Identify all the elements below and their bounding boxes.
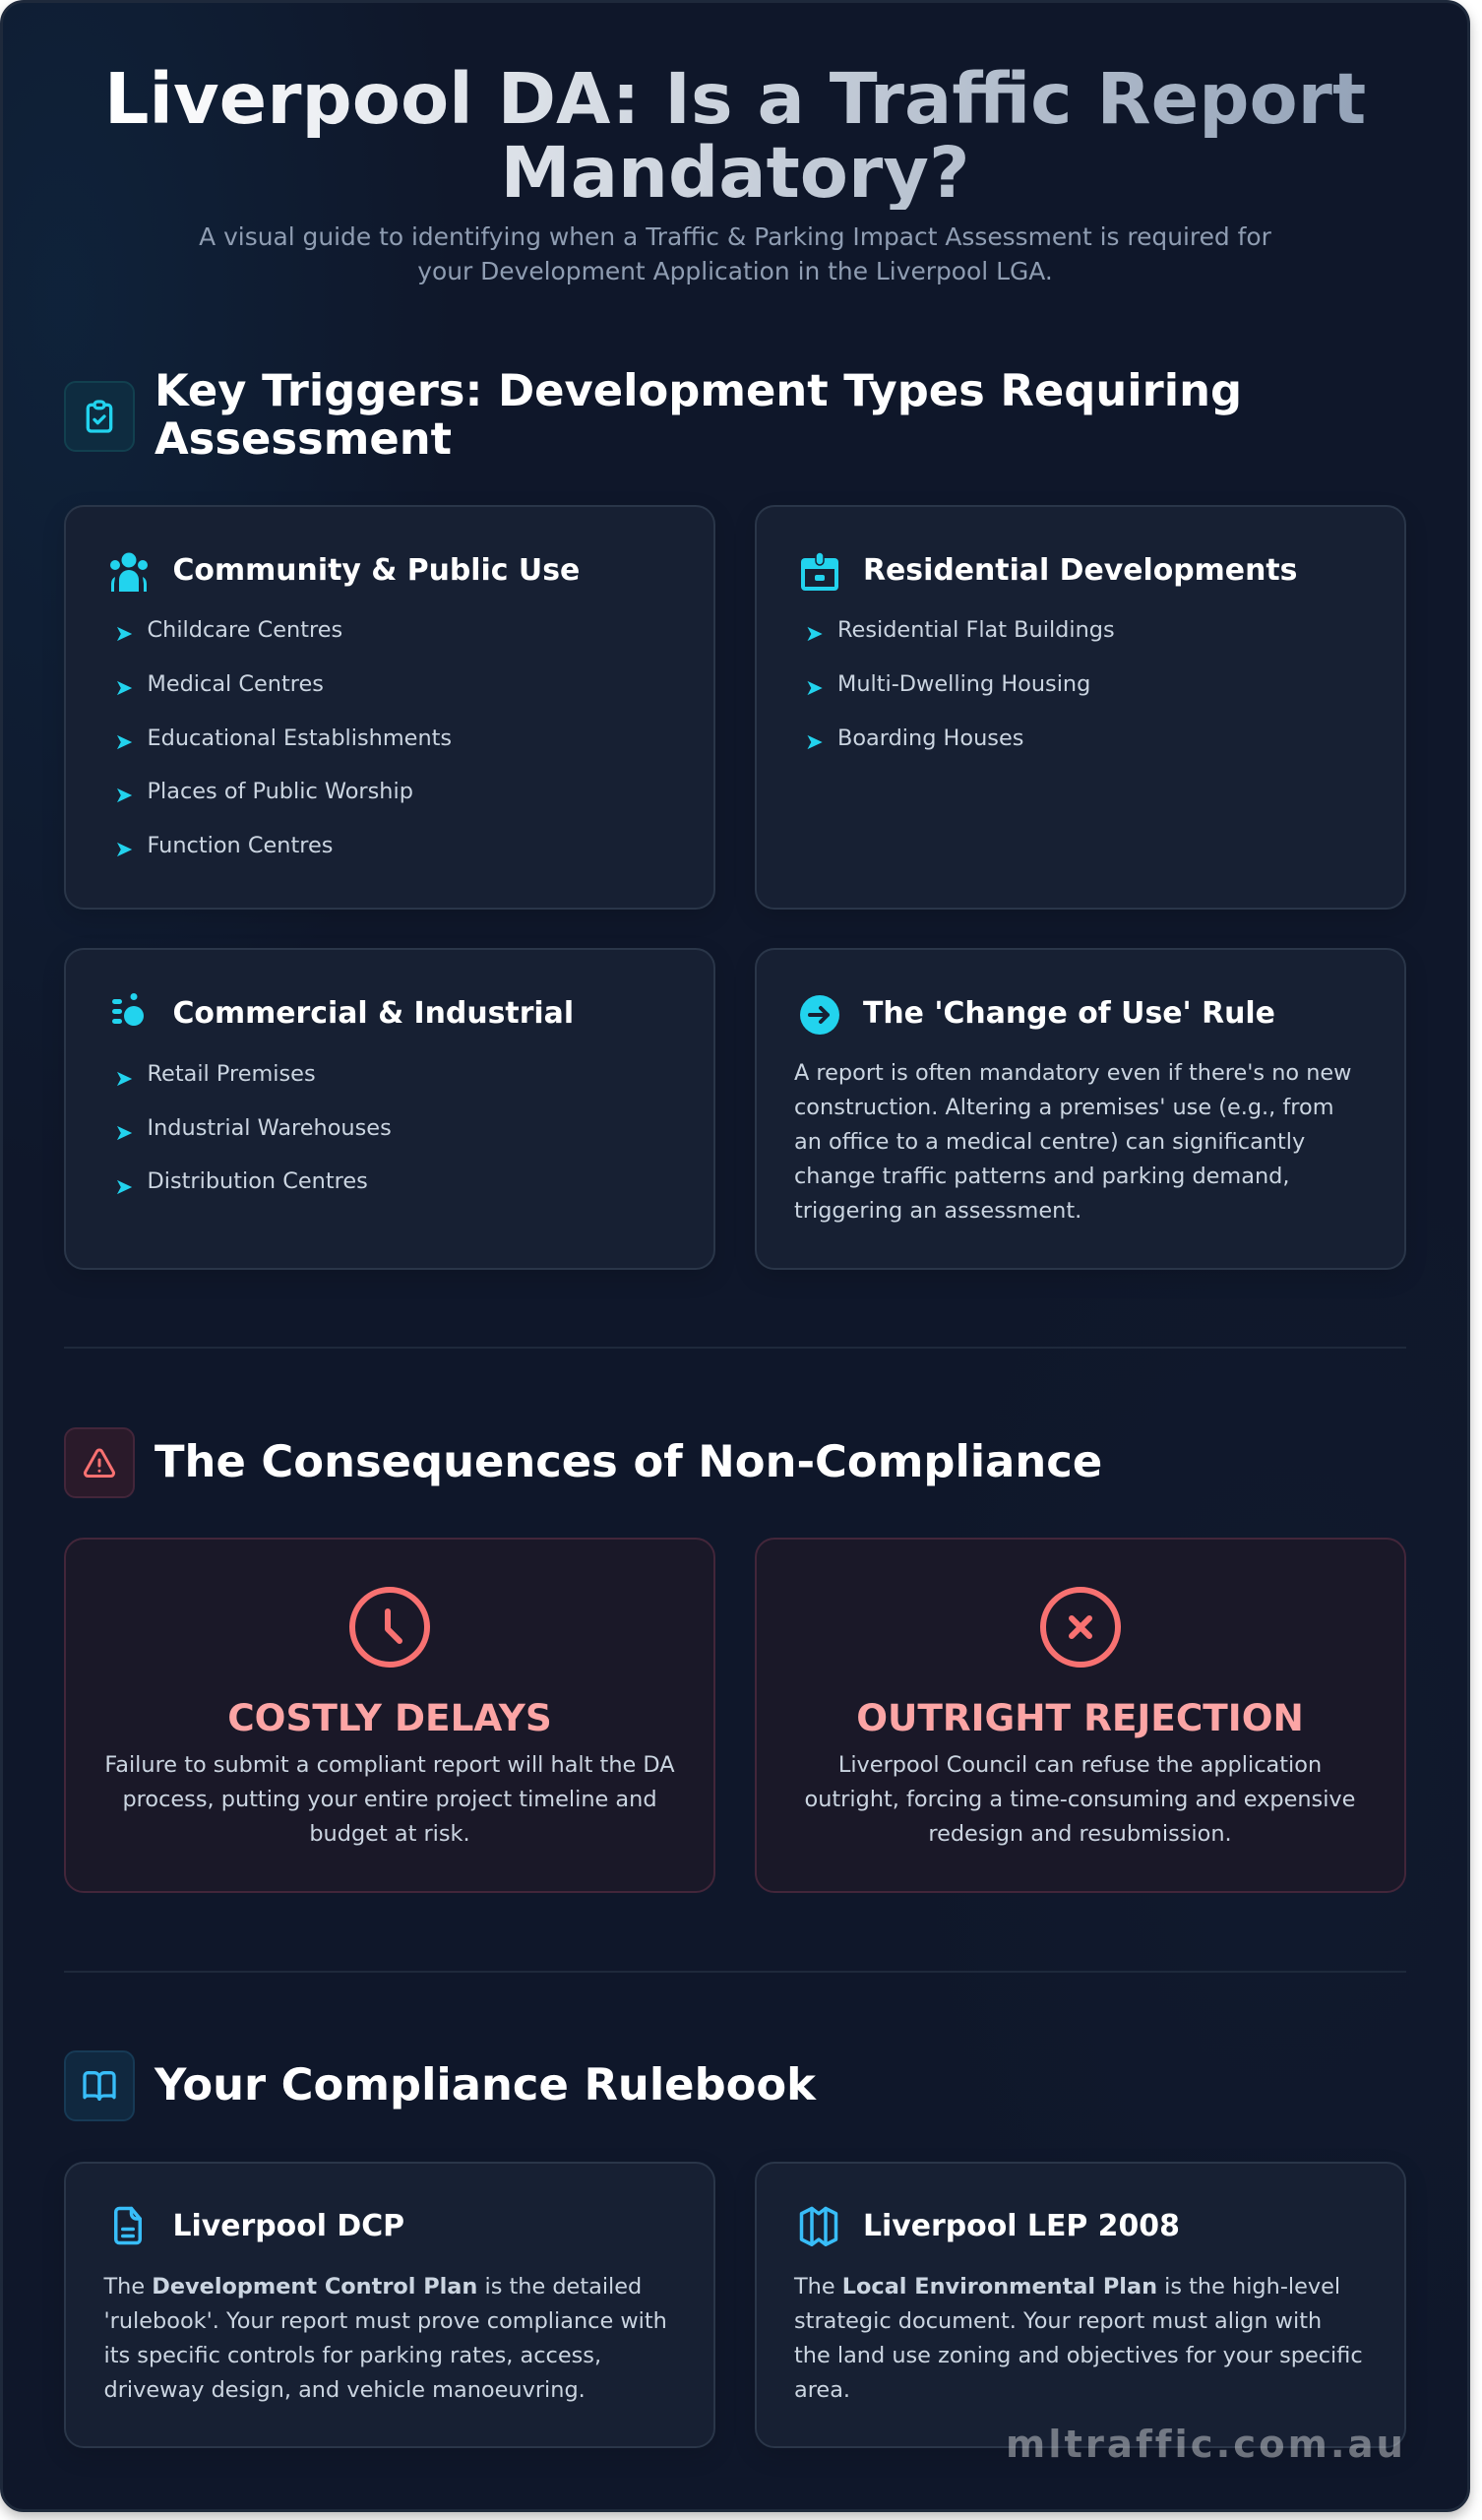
panel: outright rejection bbox=[754, 1538, 1405, 1893]
subtitle bbox=[199, 222, 1271, 285]
bullet list: ➤ bbox=[114, 837, 133, 862]
body text: construction. Altering a premises' use (e.g., from bbox=[794, 1095, 1334, 1120]
section icon: warning triangle bbox=[64, 1427, 135, 1498]
bullet list: ➤ bbox=[114, 783, 133, 808]
bullet list: Medical Centres bbox=[148, 671, 324, 697]
body text: A report is often mandatory even if there's no new bbox=[794, 1060, 1352, 1086]
icon: people bbox=[110, 553, 148, 592]
bullet list: Retail Premises bbox=[148, 1061, 316, 1087]
icon: map bbox=[799, 2207, 838, 2246]
panel: liverpool dcp bbox=[64, 2162, 715, 2448]
card heading: Liverpool LEP 2008 bbox=[863, 2209, 1180, 2243]
section heading: key triggers: Assessment bbox=[154, 411, 452, 465]
icon: arrow in circle bbox=[800, 995, 839, 1035]
section heading: rulebook: Your Compliance Rulebook bbox=[154, 2058, 816, 2110]
bullet list: Places of Public Worship bbox=[148, 779, 413, 804]
icon: clock bbox=[349, 1587, 430, 1668]
body text: an office to a medical centre) can significantly bbox=[794, 1129, 1305, 1155]
bullet list: Childcare Centres bbox=[148, 617, 342, 643]
body text bbox=[794, 1060, 1352, 1224]
body text: outright, forcing a time-consuming and expensive bbox=[805, 1786, 1355, 1811]
bullet list: ➤ bbox=[114, 621, 133, 647]
body text: The Development Control Plan is the detailed bbox=[104, 2274, 642, 2300]
body text: redesign and resubmission. bbox=[928, 1821, 1232, 1847]
body text: triggering an assessment. bbox=[794, 1198, 1081, 1224]
bullet list: Distribution Centres bbox=[148, 1168, 368, 1194]
bullet list: Industrial Warehouses bbox=[148, 1114, 392, 1140]
subtitle: A visual guide to identifying when a Traffic & Parking Impact Assessment is required for bbox=[199, 222, 1271, 251]
body text: Liverpool Council can refuse the application bbox=[838, 1752, 1322, 1778]
subtitle: your Development Application in the Liverpool LGA. bbox=[417, 257, 1053, 285]
bullet list: ➤ bbox=[805, 621, 824, 647]
bullet list: ➤ bbox=[114, 1065, 133, 1091]
card title: OUTRIGHT REJECTION bbox=[856, 1695, 1304, 1738]
body text: budget at risk. bbox=[309, 1821, 470, 1847]
panel: residential developments bbox=[754, 505, 1405, 910]
card heading: The 'Change of Use' Rule bbox=[863, 996, 1275, 1031]
panel: liverpool lep bbox=[754, 2162, 1405, 2448]
title: Mandatory? bbox=[500, 132, 970, 213]
bullet list: Educational Establishments bbox=[148, 725, 452, 751]
bullet list: ➤ bbox=[114, 1173, 133, 1199]
bullet list: Boarding Houses bbox=[837, 725, 1023, 751]
icon: circled x bbox=[1040, 1587, 1121, 1668]
body text: change traffic patterns and parking demand, bbox=[794, 1164, 1289, 1189]
body text: strategic document. Your report must align with bbox=[794, 2307, 1322, 2333]
section heading: consequences: The Consequences of Non-Compliance bbox=[154, 1435, 1102, 1487]
body text: 'rulebook'. Your report must prove compliance with bbox=[104, 2307, 667, 2333]
card heading: Liverpool DCP bbox=[173, 2209, 404, 2243]
body text: Failure to submit a compliant report will halt the DA bbox=[104, 1752, 675, 1778]
card heading: Commercial & Industrial bbox=[173, 996, 574, 1031]
card heading: Community & Public Use bbox=[173, 553, 580, 587]
panel: change of use rule bbox=[754, 948, 1405, 1270]
section icon: clipboard check bbox=[64, 381, 135, 452]
title bbox=[0, 61, 1470, 209]
card heading: Residential Developments bbox=[863, 553, 1297, 587]
body text bbox=[793, 2274, 1363, 2402]
panel: community and public use bbox=[64, 505, 715, 910]
icon: document bbox=[114, 2207, 142, 2244]
watermark: mltraffic.com.au bbox=[1006, 2422, 1406, 2467]
body text: process, putting your entire project timeline and bbox=[122, 1786, 657, 1811]
section icon: open book bbox=[64, 2050, 135, 2121]
bullet list: Function Centres bbox=[148, 833, 333, 858]
bullet list: Multi-Dwelling Housing bbox=[837, 671, 1090, 697]
bullet list: ➤ bbox=[114, 1120, 133, 1146]
bullet list: ➤ bbox=[114, 729, 133, 755]
icon: bars and dot bbox=[112, 993, 144, 1026]
icon: id badge bbox=[801, 553, 838, 591]
section heading: key triggers bbox=[154, 364, 1242, 465]
bullet list: ➤ bbox=[805, 675, 824, 701]
body text: The Local Environmental Plan is the high-level bbox=[794, 2274, 1340, 2300]
section heading: key triggers: Key Triggers: Development Types Requiring bbox=[154, 364, 1242, 415]
body text bbox=[104, 1752, 675, 1847]
body text: driveway design, and vehicle manoeuvring. bbox=[104, 2376, 586, 2402]
bullet list bbox=[114, 617, 452, 862]
body text bbox=[805, 1752, 1355, 1847]
card title: COSTLY DELAYS bbox=[227, 1695, 552, 1738]
body text bbox=[103, 2274, 667, 2402]
bullet list: Residential Flat Buildings bbox=[837, 617, 1115, 643]
panel: commercial and industrial bbox=[64, 948, 715, 1270]
bullet list bbox=[805, 617, 1115, 755]
body text: its specific controls for parking rates, access, bbox=[104, 2343, 601, 2368]
body text: area. bbox=[794, 2376, 850, 2402]
bullet list: ➤ bbox=[805, 729, 824, 755]
bullet list bbox=[114, 1061, 392, 1199]
bullet list: ➤ bbox=[114, 675, 133, 701]
title: Liverpool DA: Is a Traffic Report bbox=[104, 57, 1366, 140]
panel: costly delays bbox=[64, 1538, 715, 1893]
body text: the land use zoning and objectives for your specific bbox=[794, 2343, 1363, 2368]
